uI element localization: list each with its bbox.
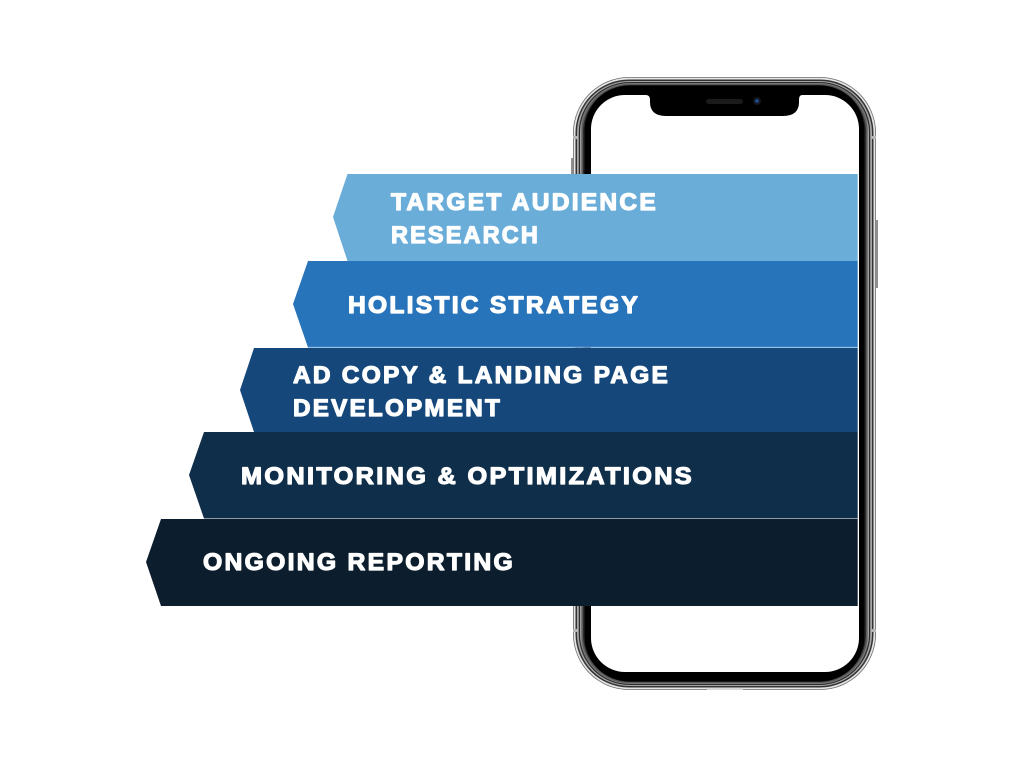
speaker (706, 99, 743, 104)
phone frame (573, 77, 876, 690)
phone (571, 77, 878, 690)
label: ongoing reporting: ONGOING REPORTING (203, 549, 515, 576)
screen (591, 95, 859, 672)
panel: ongoing reporting (146, 519, 858, 606)
label: monitoring and optimizations: MONITORING & OPTIMIZATIONS (241, 463, 694, 490)
label: ad copy and landing page development: DEVELOPMENT (293, 395, 502, 422)
panel: monitoring and optimizations (189, 432, 858, 519)
antenna seams (573, 136, 876, 690)
panel: target audience research (333, 174, 858, 261)
label: holistic strategy: HOLISTIC STRATEGY (348, 292, 640, 319)
label: ad copy and landing page development (293, 362, 670, 422)
label: target audience research: RESEARCH (391, 222, 540, 249)
panel: holistic strategy (293, 261, 858, 348)
panel: ad copy and landing page development (240, 348, 858, 432)
notch (646, 92, 802, 116)
label: target audience research: TARGET AUDIENCE (391, 189, 658, 216)
camera (753, 97, 761, 105)
side buttons (571, 158, 878, 288)
label: target audience research (391, 189, 658, 249)
label: ad copy and landing page development: AD COPY & LANDING PAGE (293, 362, 670, 389)
